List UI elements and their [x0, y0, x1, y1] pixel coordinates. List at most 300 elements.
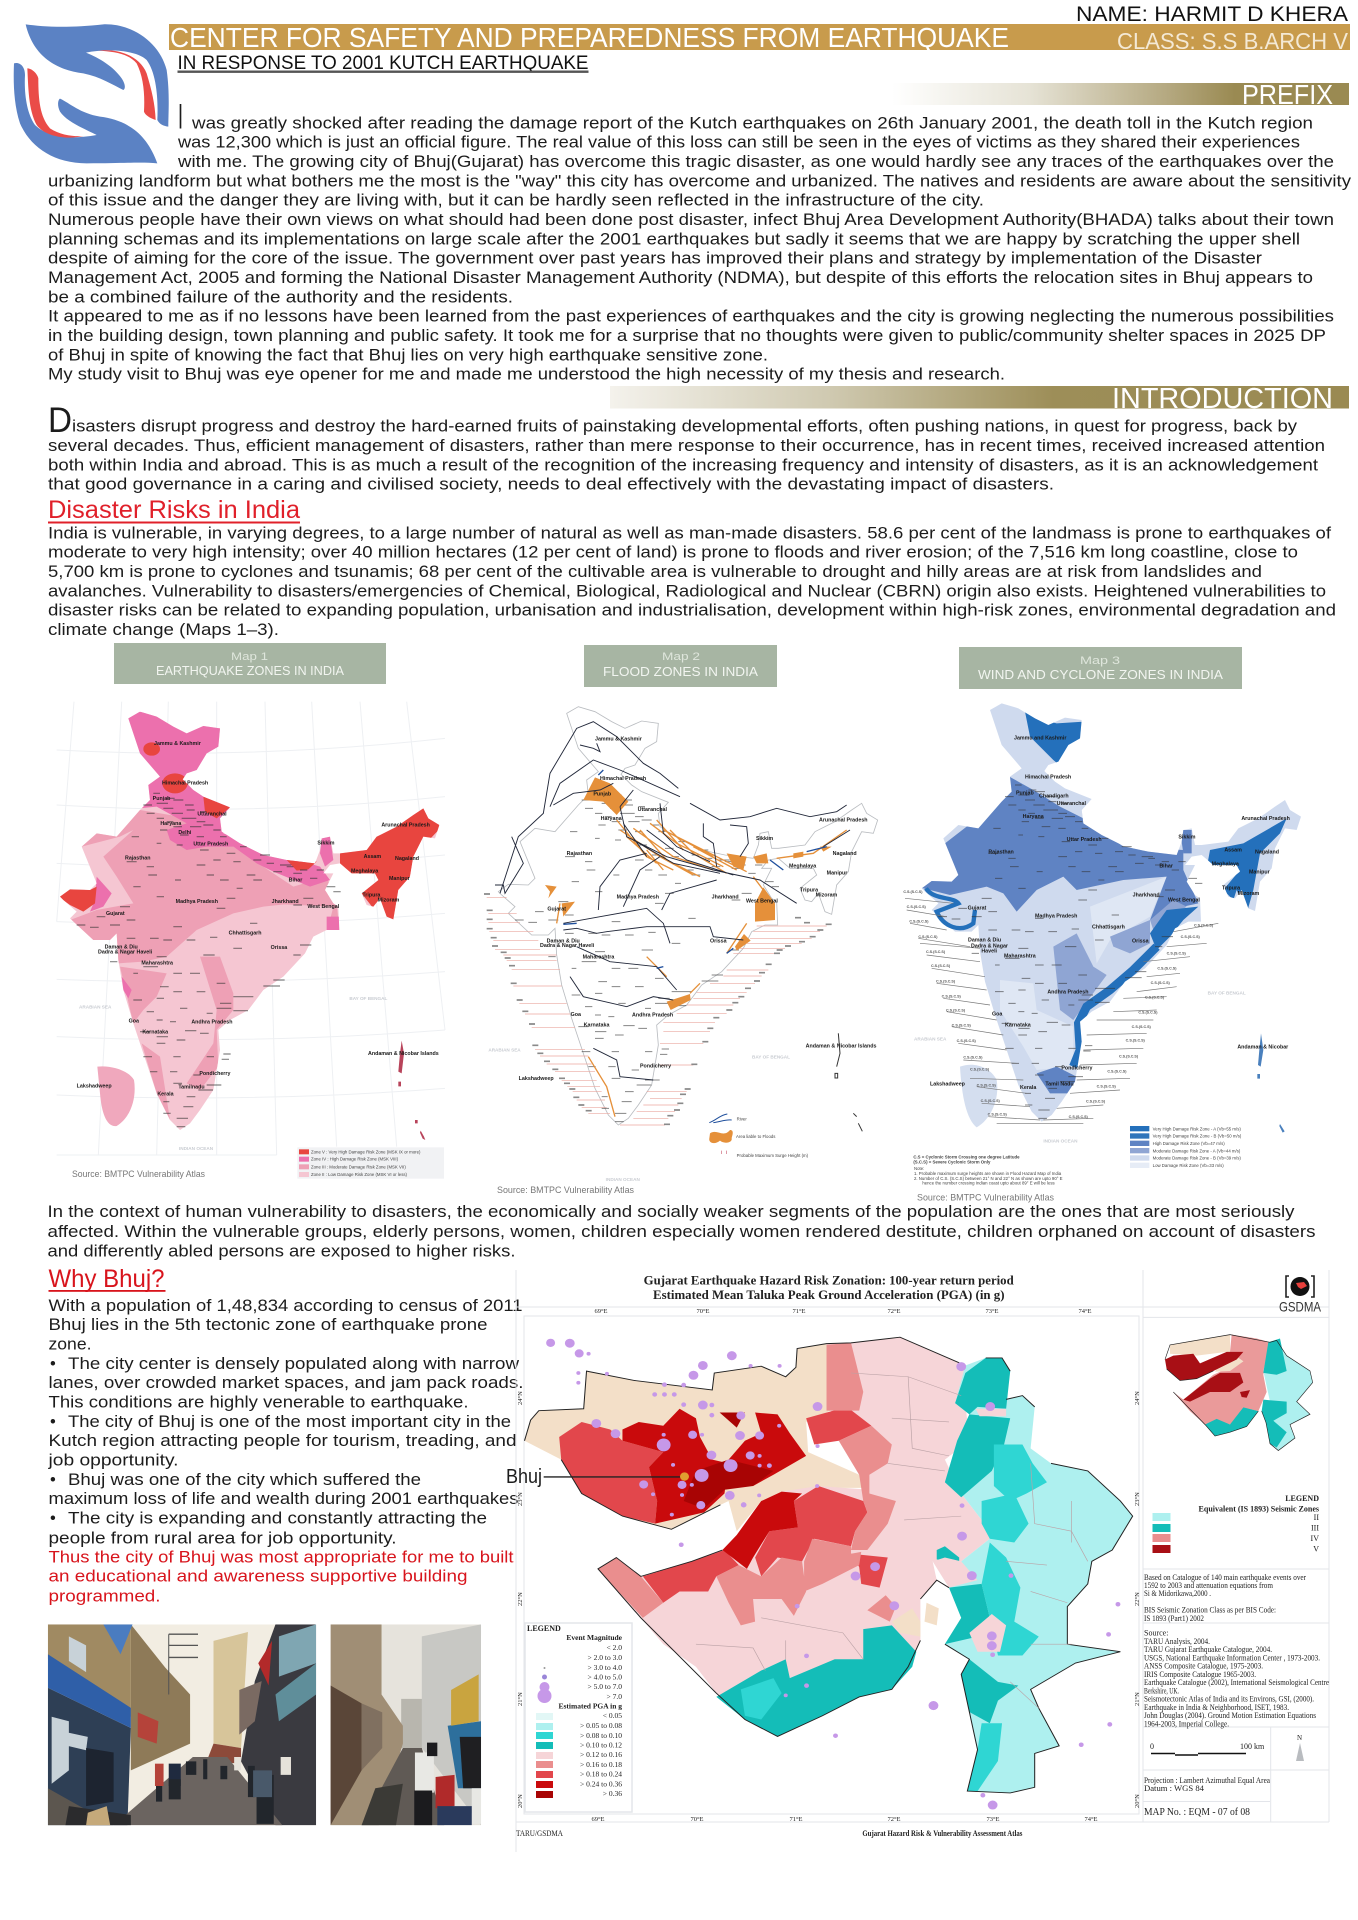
map 3 state labels: Punjab [1016, 790, 1035, 796]
gujarat map legend: LEGEND [527, 1624, 561, 1633]
map 2 state labels: Lakshadweep [519, 1076, 554, 1082]
map 1 state labels: Dadra & Nagar Haveli [98, 949, 153, 955]
coastline and district boundaries [524, 1337, 1133, 1793]
map 2 state labels: Orissa [710, 938, 727, 944]
map 3 state labels: Gujarat [968, 905, 987, 911]
gujarat map graticule labels: 22°N [1134, 1592, 1141, 1606]
map 1 state labels: Jharkhand [272, 899, 299, 905]
seismic zones legend: LEGEND [1285, 1494, 1319, 1503]
gujarat map graticule labels: 22°N [517, 1592, 524, 1606]
gujarat map legend: < 0.05 [603, 1711, 622, 1720]
map 3 state labels: ARABIAN SEA [914, 1036, 947, 1041]
cyclone count labels: C.S.(S.C.S) [1097, 1084, 1117, 1088]
heading: prefix [892, 79, 1349, 110]
map 3 notes: C.S = Cyclonic Storm Crossing one degree Latitude [913, 1155, 1020, 1160]
map 1 state labels: Nagaland [395, 856, 419, 862]
map 1 state labels: Sikkim [317, 841, 335, 847]
north arrow [1296, 1734, 1304, 1761]
gujarat map graticule labels: 73°E [986, 1816, 1000, 1823]
heading: introduction [610, 383, 1349, 415]
scale bar: 0 [1150, 1742, 1154, 1751]
map 1 state labels: Karnataka [142, 1030, 168, 1036]
text block: disaster risks: avalanches. Vulnerability to disasters/emergencies of Chemical, Biological, Radiological and Nuclear (CBRN) origin also exists. Heightened vulnerabilities to [48, 582, 1326, 600]
map 2 state labels: Manipur [827, 871, 847, 877]
gujarat hazard map: frame and titles: Gujarat Earthquake Hazard Risk Zonation: 100-year return period [644, 1274, 1014, 1288]
map 2 state labels: Uttaranchal [638, 807, 667, 813]
text block: why bhuj: Bhuj lies in the 5th tectonic zone of earthquake prone [48, 1316, 488, 1334]
map 3 state labels: West Bengal [1168, 898, 1200, 904]
map 1 legend: Zone III : Moderate Damage Risk Zone (MSK VII) [311, 1164, 406, 1169]
cyclone count labels: C.S.(S.C.S) [1151, 981, 1171, 985]
pale pink zone [598, 1337, 990, 1736]
map 1 legend: Zone V : Very High Damage Risk Zone (MSK IX or more) [311, 1149, 421, 1154]
text block: prefix: of this issue and the danger they are living with, but it can be hardly seen reflected in the infrastructure of the city. [48, 192, 984, 210]
map 3 notes: 2. Number of C.S. (S.C.S) between 21° N and 22° N as shown are upto 90° E [914, 1176, 1063, 1181]
map 1 state labels: Uttaranchal [197, 812, 227, 818]
map 1 state labels [77, 741, 439, 1151]
map 3 legend: Moderate Damage Risk Zone - B (Vb=39 m/s) [1153, 1156, 1241, 1161]
map 1 state labels: Himachal Pradesh [162, 781, 208, 787]
map 2 state labels: Jharkhand [712, 894, 739, 900]
map 2 state labels: Daman & Diu [547, 939, 580, 945]
cyclone count labels: C.S.(S.C.S) [1157, 966, 1177, 970]
gujarat map graticule labels: 71°E [792, 1308, 806, 1315]
map 2 state labels: Rajasthan [567, 851, 592, 857]
map 1 state labels: Assam [364, 854, 381, 860]
map 1 state labels: Lakshadweep [77, 1083, 112, 1089]
map 3 state labels: Jammu and Kashmir [1014, 735, 1066, 741]
map 1 state labels: Tamilnadu [178, 1084, 205, 1090]
text block: why bhuj: With a population of 1,48,834 according to census of 2011 [48, 1297, 522, 1315]
gujarat map legend: > 5.0 to 7.0 [588, 1682, 622, 1691]
map 2 legend: Area liable to Floods [736, 1134, 775, 1139]
eastern pale cyan zone [945, 1358, 1133, 1793]
gsdma logo: GSDMA [1279, 1299, 1322, 1315]
text block: why bhuj: Thus the city of Bhuj was most appropriate for me to built [48, 1549, 514, 1567]
map 2 state labels: Sikkim [756, 836, 773, 842]
source list: TARU Analysis, 2004. [1144, 1637, 1210, 1646]
map 2 legend: Probable Maximum Surge Height (m) [737, 1153, 809, 1158]
gujarat map legend: > 3.0 to 4.0 [588, 1663, 622, 1672]
map 1 state labels: Orissa [271, 945, 287, 951]
map 3 state labels: Kerala [1020, 1085, 1036, 1091]
cyclone count labels: C.S.(S.C.S) [946, 1008, 966, 1012]
map 3: wind and cyclone zones [903, 700, 1301, 1186]
cyclone count labels: C.S.(S.C.S) [1145, 996, 1165, 1000]
text block: why bhuj: an educational and awareness supportive building [48, 1568, 468, 1586]
map 2 state labels: Mizoram [816, 892, 838, 898]
text block: prefix: I [178, 97, 183, 136]
map 1 state labels: Bihar [289, 877, 302, 883]
source list: Berkshire, UK. [1144, 1686, 1179, 1696]
map 2 state labels: Gujarat [547, 907, 566, 913]
cyclone count labels: C.S.(S.C.S) [918, 935, 938, 939]
map 1 state labels: Uttar Pradesh [193, 841, 228, 847]
source list: John Douglas (2004). Ground Motion Estimation Equations [1144, 1711, 1316, 1720]
catalogue notes: IS 1893 (Part1) 2002 [1144, 1614, 1204, 1623]
map label 2: Map 2 [662, 651, 700, 663]
map 2 state labels: Goa [571, 1012, 581, 1018]
gujarat hazard map [524, 1337, 1133, 1810]
text block: prefix: It appeared to me as if no lessons have been learned from the past experiences of earthquakes and the city is growing neglecting the numerous possibilities [48, 308, 1334, 326]
map 2 state labels: Andhra Pradesh [632, 1013, 673, 1019]
gujarat map graticule labels: 71°E [789, 1816, 803, 1823]
cyclone count labels: C.S.(S.C.S) [1132, 1025, 1152, 1029]
source list: USGS, National Earthquake Information Center , 1973-2003. [1144, 1654, 1320, 1662]
source list: Source: [1144, 1628, 1168, 1638]
earthquake event dots [546, 1339, 1120, 1810]
scale bar: 100 km [1240, 1742, 1265, 1751]
gujarat hazard map: frame and titles: Estimated Mean Taluka Peak Ground Acceleration (PGA) (in g) [653, 1288, 1004, 1302]
cyclone count labels: C.S.(S.C.S) [957, 1039, 977, 1043]
cyclone crossing lines [905, 898, 1218, 1123]
text block: prefix: My study visit to Bhuj was eye opener for me and made me understood the high necessity of my thesis and research. [48, 366, 1005, 384]
gujarat map graticule labels: 69°E [591, 1816, 605, 1823]
flood areas [545, 777, 832, 1010]
map 3 state labels: BAY OF BENGAL [1208, 990, 1246, 995]
cyclone count labels: C.S.(S.C.S) [931, 964, 951, 968]
text block: prefix: despite of aiming for the core of the issue. The government over past years has improved their plans and strategy by implementation of the Disaster [48, 250, 1263, 268]
text block: why bhuj: The city of Bhuj is one of the most important city in the [68, 1413, 511, 1431]
map 3 state labels: Karnataka [1005, 1023, 1031, 1029]
catalogue notes: Si & Midorikawa,2000 . [1144, 1589, 1211, 1598]
map 3 state labels: Tamil Nadu [1045, 1081, 1074, 1087]
map 1 state labels: INDIAN OCEAN [179, 1146, 214, 1151]
cyclone count labels: C.S.(S.C.S) [1086, 1099, 1106, 1103]
map 2 state labels: Nagaland [833, 851, 857, 857]
text block: why bhuj: • [50, 1510, 56, 1528]
text block: prefix: Management Act, 2005 and forming the National Disaster Management Authority (NDMA), but despite of this efforts the relocation sites in Bhuj appears to [48, 269, 1313, 287]
map 2 state labels: Maharashtra [583, 954, 614, 960]
gujarat map legend: > 0.10 to 0.12 [580, 1740, 622, 1750]
seismic red zones [559, 1407, 888, 1603]
gujarat map legend: > 0.12 to 0.16 [580, 1750, 622, 1759]
map 3 state labels: Mizoram [1238, 891, 1260, 897]
map label 1: EARTHQUAKE ZONES IN INDIA [156, 664, 345, 678]
map 3 legend: Very High Damage Risk Zone - A (Vb=55 m/s) [1153, 1127, 1241, 1132]
map 2 state labels: INDIAN OCEAN [606, 1177, 640, 1182]
map 3 state labels: Andaman & Nicobar [1237, 1044, 1288, 1050]
map 2 state labels: Tripura [800, 887, 818, 893]
map 2 state labels: Meghalaya [789, 863, 816, 869]
map 1 state labels: Punjab [153, 796, 171, 802]
right information panel [1143, 1270, 1329, 1822]
kutch salt desert [524, 1344, 869, 1531]
map 3 state labels: Dadra & Nagar [971, 943, 1008, 949]
gujarat hazard map: frame and titles: Gujarat Hazard Risk & Vulnerability Assessment Atlas [862, 1829, 1022, 1838]
text block: human vulnerability: affected. Within the vulnerable groups, elderly persons, women, children especially women rendered destitute, children orphaned on account of disasters [48, 1223, 1316, 1241]
title banner: CENTER FOR SAFETY AND PREPAREDNESS FROM EARTHQUAKE [170, 22, 1009, 53]
map 3 state labels: Tripura [1222, 885, 1240, 891]
gujarat map graticule labels: 72°E [887, 1816, 901, 1823]
gujarat map legend: < 2.0 [607, 1643, 622, 1652]
gujarat map legend: Estimated PGA in g [558, 1702, 622, 1710]
map 3 state labels: Rajasthan [988, 849, 1014, 855]
cyclone count labels: C.S.(S.C.S) [909, 919, 929, 923]
map label 3: Map 3 [1080, 655, 1120, 667]
photo: bhuj narrow lane [331, 1624, 481, 1825]
gujarat map graticule labels: 74°E [1078, 1308, 1092, 1315]
source list: Seismotectonic Atlas of India and its Environs, GSI, (2000). [1144, 1694, 1314, 1704]
map 3 state labels: Bihar [1159, 863, 1173, 869]
gsdma logo [1279, 1276, 1322, 1315]
map 1 state labels: Rajasthan [125, 855, 150, 861]
map 3 legend [1130, 1126, 1242, 1168]
map 3 notes: (S.C.S) = Severe Cyclonic Storm Only [913, 1159, 991, 1164]
text block: why bhuj: • [50, 1355, 56, 1373]
seismic zones legend: IV [1311, 1534, 1319, 1543]
map 1 legend [297, 1147, 444, 1179]
map 3 state labels: INDIAN OCEAN [1043, 1139, 1078, 1144]
map 1 state labels: Arunachal Pradesh [381, 822, 430, 828]
gujarat map legend: > 0.18 to 0.24 [580, 1770, 622, 1778]
map 3 notes: hence the number crossing Indian coast upto about 89° E will be less [922, 1181, 1055, 1186]
map 3 state labels: Haryana [1023, 814, 1044, 820]
map 1 state labels: Haryana [160, 821, 181, 827]
map 3 legend: Low Damage Risk Zone (Vb=33 m/s) [1153, 1163, 1224, 1168]
text block: introduction: that good governance in a caring and civilised society, needs to deal effectively with the devastating impact of disasters. [48, 476, 1054, 494]
text block: introduction: several decades. Thus, efficient management of disasters, rather than mere response to their occurrence, has in recent times, received increased attention [48, 437, 1325, 455]
text block: introduction [48, 401, 1325, 494]
map 1 state labels: ARABIAN SEA [79, 1005, 112, 1010]
source list: Earthquake Catalogue (2002), International Seismological Centre [1144, 1678, 1329, 1687]
map 1 state labels: Madhya Pradesh [176, 899, 218, 905]
source list: TARU Gujarat Earthquake Catalogue, 2004. [1144, 1645, 1272, 1654]
cyclone count labels [903, 890, 1214, 1119]
map 2 state labels: Haryana [601, 816, 622, 822]
map 3 state labels: Uttar Pradesh [1067, 837, 1102, 843]
gujarat map graticule labels: 21°N [517, 1692, 524, 1706]
projection notes: Projection : Lambert Azimuthal Equal Area [1144, 1776, 1270, 1785]
map 1 state labels: Tripura [362, 893, 380, 899]
cyclone count labels: C.S.(S.C.S) [952, 1023, 972, 1027]
map 3 state labels: Haveli [981, 949, 998, 955]
seismic zones legend [1152, 1494, 1319, 1554]
bhuj marker [544, 1472, 689, 1481]
map 1 legend: Zone II : Low Damage Risk Zone (MSK VI or less) [311, 1172, 408, 1177]
seismic zones legend: Equivalent (IS 1893) Seismic Zones [1199, 1504, 1319, 1514]
cyclone count labels: C.S.(S.C.S) [988, 1113, 1008, 1117]
source list [1144, 1628, 1329, 1728]
text block: why bhuj: • [50, 1413, 56, 1431]
subtitle: IN RESPONSE TO 2001 KUTCH EARTHQUAKE [178, 52, 588, 74]
map 3 state labels: Uttaranchal [1057, 801, 1086, 807]
photo: bhuj market street [48, 1624, 316, 1825]
gujarat map legend: Event Magnitude [566, 1633, 623, 1642]
map 2 state labels: Punjab [593, 792, 612, 798]
map 2 state labels: Jammu & Kashmir [595, 737, 642, 743]
gujarat map graticule labels: 74°E [1084, 1816, 1098, 1823]
cyclone count labels: C.S.(S.C.S) [963, 1056, 983, 1060]
map 1 state labels: Mizoram [378, 898, 400, 904]
text block: prefix: planning schemas and its implementations on large scale after the 2001 earthquakes but sadly it seems that we are happy by scratching the upper shell [48, 230, 1300, 248]
text block: why bhuj: The city center is densely populated along with narrow [68, 1355, 519, 1373]
gujarat map legend: > 0.36 [603, 1789, 622, 1798]
map 1 state labels: BAY OF BENGAL [349, 996, 388, 1001]
map label 1: Map 1 [231, 651, 268, 663]
text block: prefix: with me. The growing city of Bhuj(Gujarat) has overcome this tragic disaster, as one would hardly see any traces of the earthquakes over the [177, 153, 1334, 171]
map 1 state labels: Daman & Diu [105, 944, 138, 950]
cyclone count labels: C.S.(S.C.S) [926, 950, 946, 954]
map 1 state labels: Meghalaya [351, 868, 378, 874]
gujarat map graticule labels: 70°E [690, 1816, 704, 1823]
catalogue notes: 1592 to 2003 and attenuation equations from [1144, 1581, 1274, 1590]
map 3 state labels: Daman & Diu [968, 938, 1001, 944]
map 1 state labels: Kerala [157, 1092, 174, 1098]
source note map 3: Source: BMTPC Vulnerability Atlas [917, 1193, 1054, 1204]
text block: prefix: was greatly shocked after reading the damage report of the Kutch earthquakes on 26th January 2001, the death toll in the Kutch region [191, 114, 1313, 132]
map 3 state labels: Sikkim [1178, 835, 1196, 841]
map 1 legend: Zone IV : High Damage Risk Zone (MSK VIII) [311, 1157, 399, 1162]
map 2 state labels: ARABIAN SEA [488, 1047, 521, 1052]
map 3 state labels: Jharkhand [1133, 893, 1160, 899]
text block: why bhuj: programmed. [48, 1588, 160, 1606]
gujarat hazard map: frame and titles: TARU/GSDMA [516, 1829, 563, 1838]
map 1 state labels: Andaman & Nicobar Islands [368, 1051, 439, 1057]
text block: introduction: isasters disrupt progress and destroy the hard-earned fruits of painstaking developmental efforts, often pushing nations, in quest for progress, back by [72, 418, 1298, 436]
map 3 state labels: Manipur [1249, 869, 1270, 875]
text block: prefix: in the building design, town planning and public safety. It took me for a surprise that no thoughts were given to public/community shelter spaces in 2025 DP [48, 327, 1326, 345]
map 3 state labels: Himachal Pradesh [1025, 775, 1071, 781]
map label 2: FLOOD ZONES IN INDIA [603, 665, 759, 679]
gujarat map graticule labels: 24°N [1134, 1391, 1141, 1405]
seismic zones legend: V [1313, 1544, 1319, 1554]
gujarat map legend: > 0.05 to 0.08 [580, 1721, 622, 1730]
map label 2 [584, 645, 777, 687]
text block: why bhuj: zone. [48, 1336, 92, 1354]
text block: human vulnerability: In the context of human vulnerability to disasters, the economically and socially weaker segments of the population are the ones that are most seriously [48, 1203, 1295, 1221]
map 3 state labels: Meghalaya [1212, 862, 1239, 868]
map 1 state labels: Jammu & Kashmir [154, 741, 201, 747]
map 1 state labels: Pondicherry [199, 1071, 230, 1077]
cyclone count labels: C.S.(S.C.S) [1069, 1115, 1089, 1119]
map 2 state labels: Madhya Pradesh [617, 894, 659, 900]
map 3 state labels: Orissa [1132, 939, 1149, 945]
source list: Earthquake in India & Neighborhood, ISET, 1983. [1144, 1703, 1289, 1712]
cyclone count labels: C.S.(S.C.S) [1126, 1038, 1146, 1042]
map 3 state labels: Arunachal Pradesh [1241, 816, 1290, 822]
heading: prefix: PREFIX [1242, 79, 1333, 110]
cyclone count labels: C.S.(S.C.S) [907, 905, 927, 909]
source list: IRIS Composite Catalogue 1965-2003. [1144, 1670, 1256, 1679]
map 3 state labels [914, 735, 1290, 1144]
map 1 state labels: Goa [129, 1019, 139, 1025]
cyclone count labels: C.S.(S.C.S) [1138, 1011, 1158, 1015]
map 2 legend: River [737, 1117, 747, 1122]
text block: prefix: be a combined failure of the authority and the residents. [48, 288, 513, 306]
cyclone count labels: C.S.(S.C.S) [981, 1099, 1001, 1103]
map 2 state labels: BAY OF BENGAL [752, 1054, 790, 1059]
map 2 state labels: Pondicherry [640, 1063, 671, 1069]
gujarat map graticule labels: 21°N [1134, 1692, 1141, 1706]
map 2 state labels: Dadra & Nagar Haveli [540, 943, 595, 949]
gujarat map legend: > 0.24 to 0.36 [580, 1780, 622, 1788]
map 3 legend: Very High Damage Risk Zone - B (Vb=50 m/s) [1153, 1134, 1242, 1139]
map 2 state labels: Himachal Pradesh [600, 776, 646, 782]
student name: NAME: HARMIT D KHERA [1076, 3, 1348, 26]
text block: introduction: both within India and abroad. This is as much a result of the recognition of the increasing frequency and intensity of disasters, as it is an acknowledgement [48, 456, 1318, 474]
projection notes: MAP No. : EQM - 07 of 08 [1144, 1807, 1250, 1818]
seismic zones legend: II [1314, 1513, 1319, 1522]
map 3 state labels: Andhra Pradesh [1047, 989, 1088, 995]
map 3 state labels: Pondicherry [1061, 1065, 1092, 1071]
cyclone count labels: C.S.(S.C.S) [903, 890, 923, 894]
text block: prefix: urbanizing landform but what bothers me the most is the "way" this city has overcome and urbanized. The natives and residents are aware about the sensitivity [48, 172, 1352, 190]
gujarat map graticule labels: 73°E [985, 1308, 999, 1315]
map 2: flood zones [484, 707, 878, 1182]
text block: why bhuj: lanes, over crowded market spaces, and jam pack roads. [48, 1374, 524, 1392]
text block: disaster risks: India is vulnerable, in varying degrees, to a large number of natural as well as man-made disasters. 58.6 per cent of the landmass is prone to earthquakes of [48, 524, 1331, 542]
gujarat map graticule labels: 20°N [517, 1794, 524, 1808]
map 2 state labels: Karnataka [584, 1023, 609, 1029]
map 3 legend: High Damage Risk Zone (Vb=47 m/s) [1153, 1141, 1225, 1146]
map 2 state labels [488, 737, 876, 1182]
gujarat map legend: > 4.0 to 5.0 [588, 1672, 622, 1682]
seismic teal zones [716, 1358, 1018, 1736]
gujarat hazard map: frame and titles [516, 1270, 1329, 1852]
map label 3 [959, 647, 1242, 689]
map 2 state labels: West Bengal [746, 899, 778, 905]
text block: disaster risks: moderate to very high intensity; over 40 million hectares (12 per cent of land) is prone to floods and river erosion; of the 7,516 km long coastline, close to [48, 544, 1298, 562]
catalogue notes: Based on Catalogue of 140 main earthquake events over [1144, 1573, 1306, 1582]
title banner: CLASS: S.S B.ARCH V [1117, 28, 1349, 54]
text block: prefix: of Bhuj in spite of knowing the fact that Bhuj lies on very high earthquake sensitive zone. [48, 346, 768, 364]
gujarat map graticule labels: 70°E [696, 1308, 710, 1315]
map 3 notes: Note: [914, 1166, 924, 1171]
map 3 state labels: Lakshadweep [930, 1081, 966, 1087]
source list: ANSS Composite Catalogue, 1975-2003. [1144, 1662, 1263, 1670]
map 1 state labels: Andhra Pradesh [191, 1019, 232, 1025]
heading: introduction: INTRODUCTION [1112, 383, 1333, 415]
map 3 state labels: Maharashtra [1004, 954, 1036, 960]
projection notes: Datum : WGS 84 [1144, 1784, 1204, 1793]
text block: why bhuj [47, 1297, 523, 1606]
scale bar [1150, 1742, 1265, 1755]
cyclone count labels: C.S.(S.C.S) [1167, 951, 1187, 955]
cyclone count labels: C.S.(S.C.S) [1119, 1055, 1139, 1059]
logo: two hands [14, 24, 169, 163]
cyclone count labels: C.S.(S.C.S) [1181, 935, 1201, 939]
gujarat map legend: > 2.0 to 3.0 [588, 1653, 622, 1662]
gujarat map graticule labels: 20°N [1134, 1794, 1141, 1808]
map label 3: WIND AND CYCLONE ZONES IN INDIA [978, 668, 1224, 682]
cyclone count labels: C.S.(S.C.S) [1107, 1069, 1127, 1073]
text block: introduction: D [48, 401, 72, 440]
gujarat map graticule labels: 23°N [517, 1492, 524, 1506]
gujarat map graticule labels: 72°E [887, 1308, 901, 1315]
text block: why bhuj: The city is expanding and constantly attracting the [68, 1510, 487, 1528]
cyclone count labels: C.S.(S.C.S) [936, 979, 956, 983]
map 2 legend [709, 1114, 809, 1158]
cyclone count labels: C.S.(S.C.S) [942, 994, 962, 998]
gujarat map graticule labels: 69°E [594, 1308, 608, 1315]
north arrow: N [1297, 1734, 1302, 1742]
surge height lines [487, 897, 827, 1125]
text block: why bhuj: maximum loss of life and wealth during 2001 earthquakes [48, 1490, 518, 1508]
map 3 state labels: Assam [1224, 848, 1242, 854]
text block: human vulnerability: and differently abled persons are exposed to higher risks. [48, 1242, 516, 1260]
text block: disaster risks [48, 524, 1336, 639]
gujarat map graticule labels: 23°N [1134, 1492, 1141, 1506]
projection notes [1144, 1776, 1270, 1818]
text block: human vulnerability [48, 1203, 1316, 1260]
cyclone count labels: C.S.(S.C.S) [977, 1083, 997, 1087]
map 3 state labels: Madhya Pradesh [1035, 914, 1077, 920]
catalogue notes: BIS Seismic Zonation Class as per BIS Code: [1144, 1606, 1276, 1614]
cyclone count labels: C.S.(S.C.S) [970, 1067, 990, 1071]
text block: why bhuj: Kutch region attracting people for tourism, treading, and [48, 1432, 516, 1450]
mini seismic zone map [1165, 1335, 1313, 1451]
